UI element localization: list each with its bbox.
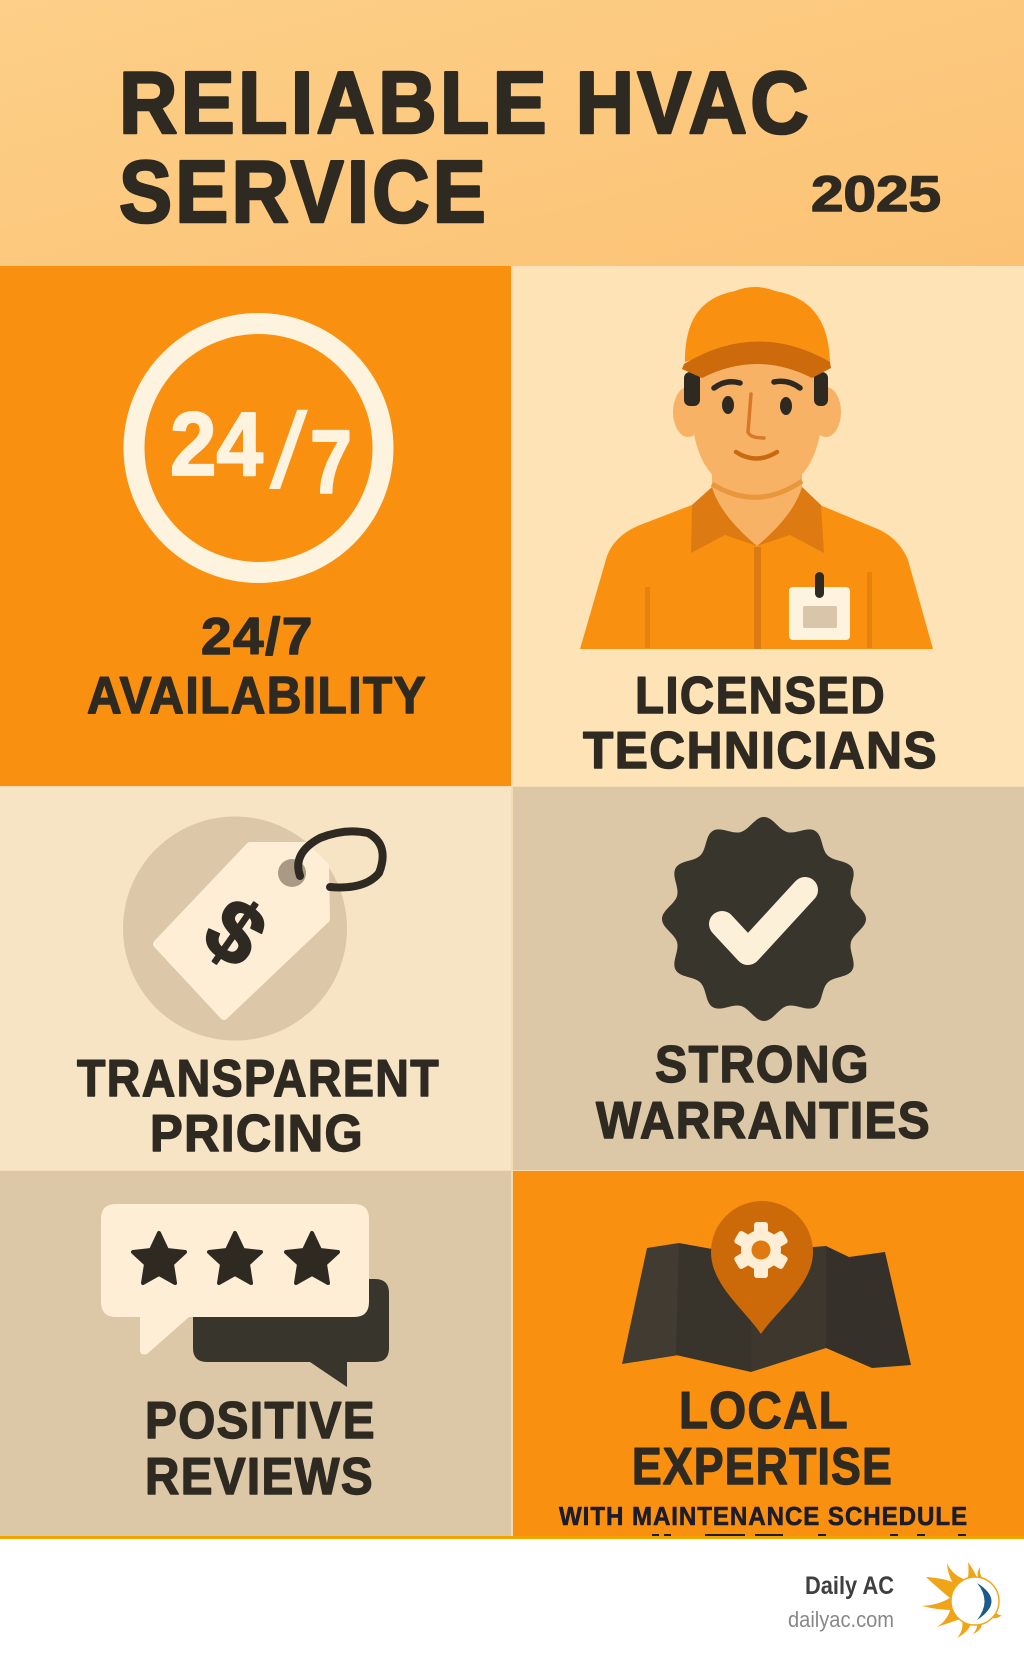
- icon: price tag: $: [187, 877, 284, 987]
- label: strong warranties: [596, 1036, 931, 1150]
- stars: [133, 1233, 338, 1283]
- panel: 24/7 availability: [0, 266, 511, 786]
- label: transparent pricing: [77, 1050, 440, 1163]
- id badge: [789, 587, 850, 640]
- cap: [685, 287, 830, 362]
- title: RELIABLE HVAC: [119, 53, 812, 152]
- label: strong warranties: STRONG: [655, 1036, 870, 1094]
- label: positive reviews: REVIEWS: [145, 1448, 374, 1506]
- panel: licensed technicians: [513, 266, 1024, 786]
- label: licensed technicians: TECHNICIANS: [583, 722, 938, 780]
- panel: local expertise: [513, 1171, 1024, 1536]
- icon: technician: [580, 287, 933, 649]
- year: 2025: [811, 166, 941, 222]
- label: strong warranties: WARRANTIES: [596, 1092, 931, 1150]
- label: licensed technicians: LICENSED: [635, 667, 886, 725]
- subtitle: with maintenance schedule: WITH MAINTENANCE SCHEDULE: [559, 1501, 968, 1531]
- icon: map with pin: [622, 1201, 911, 1372]
- panel: header: [0, 0, 1024, 266]
- shirt: [580, 505, 933, 649]
- head: [673, 387, 703, 437]
- icon: 24/7 clock ring: [134, 324, 383, 572]
- gear: [733, 1222, 789, 1278]
- label: 24/7 availability: [87, 608, 427, 725]
- label: licensed technicians: [583, 667, 938, 780]
- label: 24/7 availability: AVAILABILITY: [87, 667, 427, 725]
- icon: price tag: [123, 816, 383, 1040]
- title: SERVICE: [119, 142, 489, 241]
- label: transparent pricing: TRANSPARENT: [77, 1050, 440, 1108]
- label: 24/7 availability: 24/7: [201, 608, 314, 666]
- label: local expertise: EXPERTISE: [632, 1438, 893, 1496]
- label: positive reviews: [145, 1392, 376, 1506]
- brand name: Daily AC: [805, 1572, 894, 1600]
- icon: 24/7 clock ring: 7: [310, 413, 352, 513]
- panel: transparent pricing: [0, 787, 511, 1170]
- label: local expertise: LOCAL: [679, 1382, 849, 1440]
- title: [119, 53, 812, 241]
- icon: 24/7 clock ring: /: [269, 390, 308, 511]
- label: local expertise: [632, 1382, 893, 1496]
- icon: sun and moon logo: [922, 1562, 1002, 1638]
- label: transparent pricing: PRICING: [150, 1105, 364, 1163]
- panel: strong warranties: [513, 787, 1024, 1170]
- brand url: dailyac.com: [788, 1607, 894, 1632]
- icon: review speech bubbles: [101, 1204, 389, 1387]
- icon: check badge: [662, 817, 866, 1021]
- label: positive reviews: POSITIVE: [145, 1392, 376, 1450]
- panel: positive reviews: [0, 1171, 511, 1536]
- footer: brand: [788, 1562, 1002, 1638]
- icon: 24/7 clock ring: 24: [170, 395, 263, 495]
